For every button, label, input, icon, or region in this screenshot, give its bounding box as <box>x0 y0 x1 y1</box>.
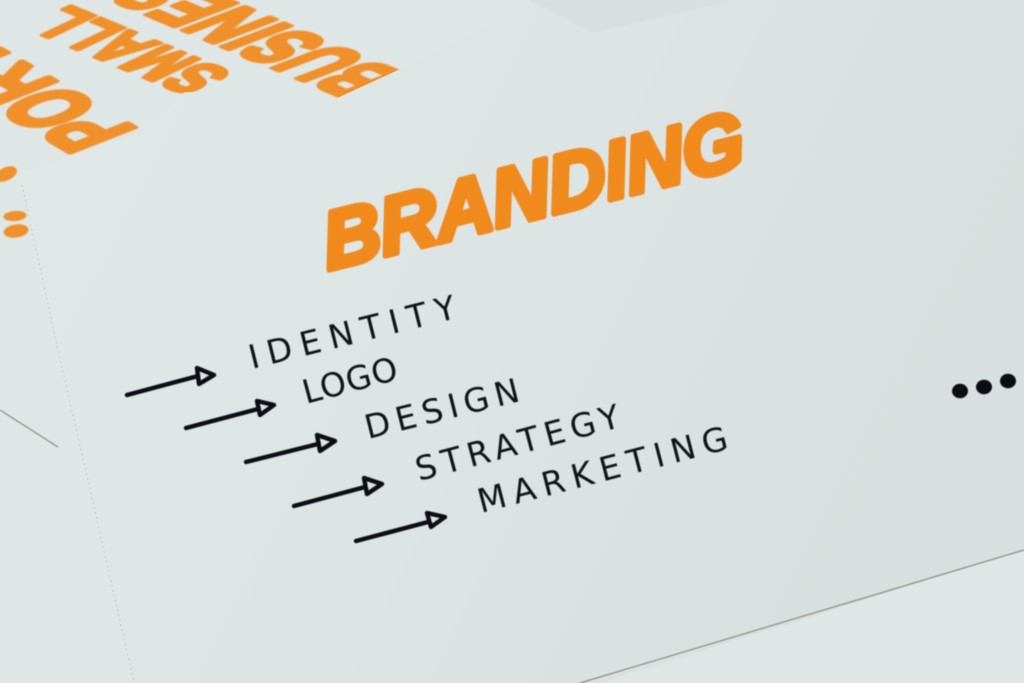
arrow 4 <box>294 478 382 506</box>
list of branding terms <box>245 287 732 521</box>
left sheet edge line <box>0 410 58 447</box>
arrow 1 <box>127 368 214 395</box>
perforated left edge <box>22 185 134 683</box>
list item: identity: IDENTITY <box>245 287 460 377</box>
top shadow patch <box>528 0 735 33</box>
list item: design: DESIGN <box>361 371 523 447</box>
list item: marketing: MARKETING <box>473 419 732 521</box>
upside-down word: small: SMALL <box>10 0 249 102</box>
sheet bottom edge line <box>580 550 1024 683</box>
arrow 5 <box>356 513 445 541</box>
orange fragments at sheet edge <box>0 165 28 237</box>
top right corner sheet <box>947 0 1024 123</box>
arrow 3 <box>246 435 335 462</box>
arrow 2 <box>186 401 274 428</box>
arrows <box>127 368 445 541</box>
list item: strategy: STRATEGY <box>411 396 625 489</box>
back sheet with upside-down orange text <box>0 0 427 237</box>
list item: logo: LOGO <box>298 349 402 412</box>
heading: branding: BRANDING <box>317 93 750 287</box>
ellipsis dots <box>952 374 1016 398</box>
